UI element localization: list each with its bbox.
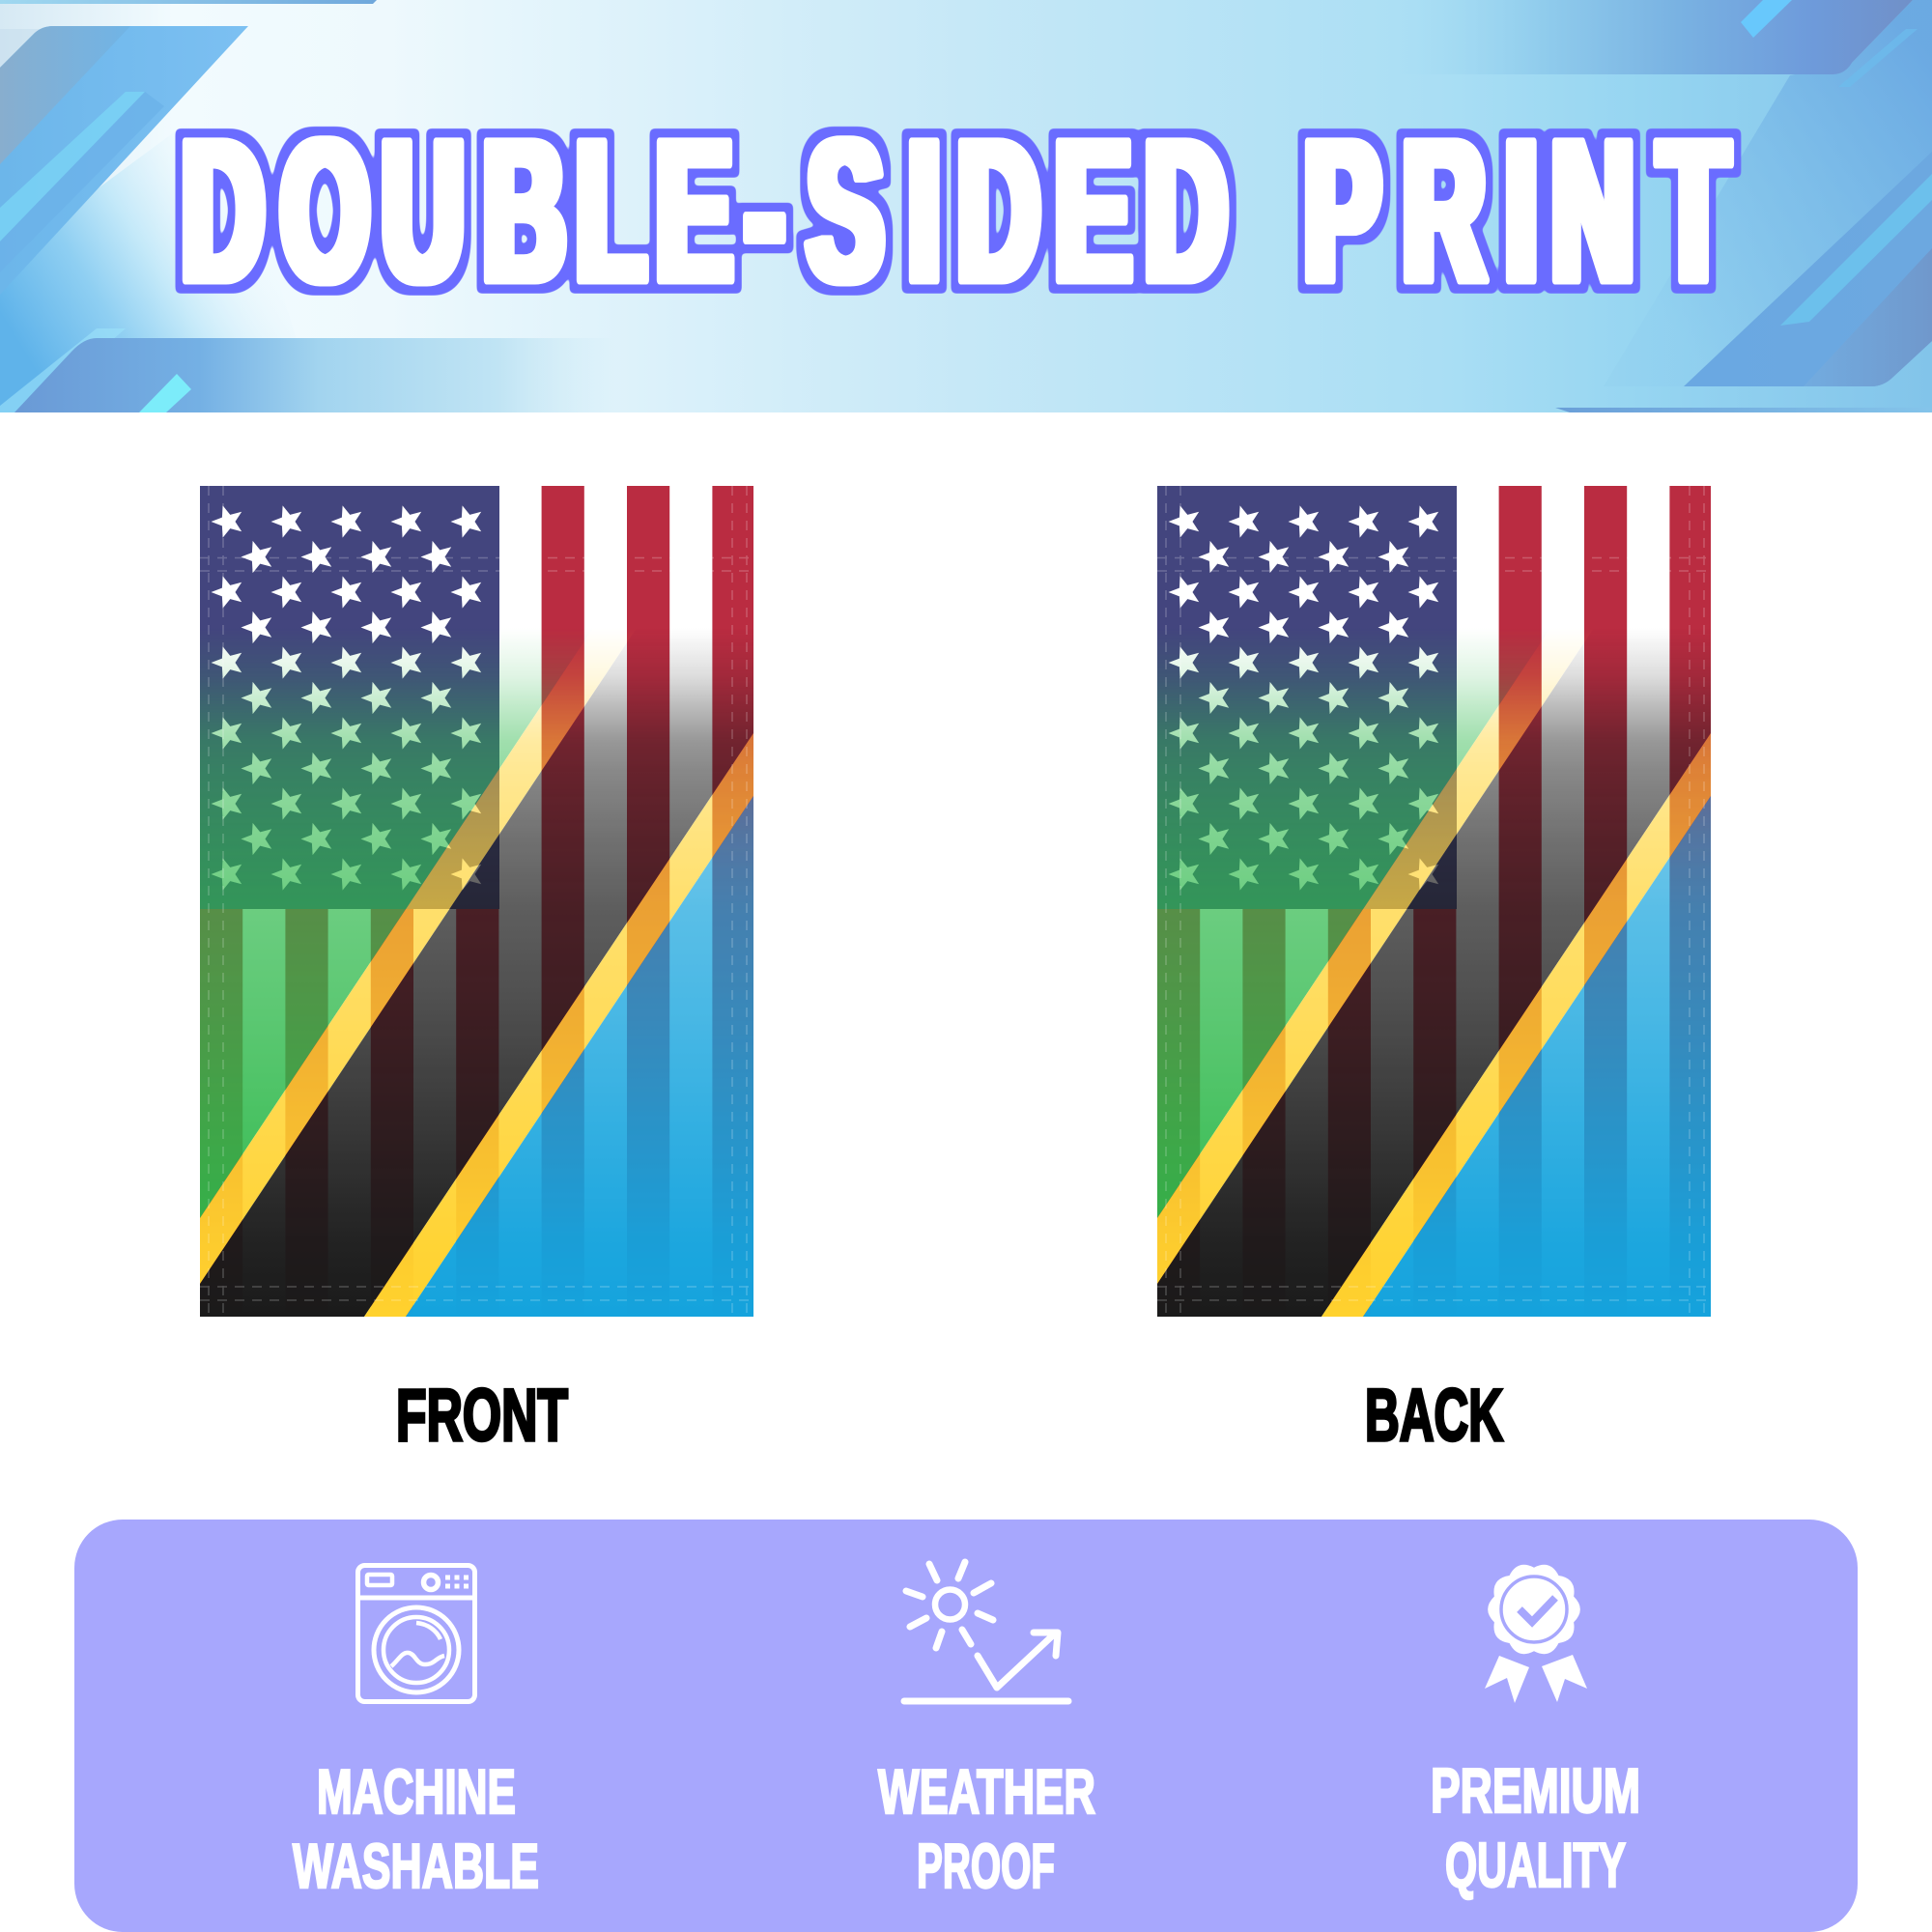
flag: front	[200, 486, 755, 1317]
label: machine washable	[293, 1756, 539, 1901]
icon: sun and weather check	[904, 1562, 1068, 1701]
label: premium quality	[1431, 1755, 1640, 1900]
panel: features	[74, 1520, 1858, 1932]
label: weather proof	[878, 1756, 1095, 1901]
header banner	[0, 0, 1932, 412]
label: premium quality: PREMIUM	[1431, 1755, 1640, 1826]
icon: quality ribbon badge	[1485, 1565, 1587, 1703]
label: weather proof: WEATHER	[878, 1756, 1095, 1827]
label: premium quality: QUALITY	[1445, 1830, 1626, 1900]
flag: back	[1157, 486, 1713, 1317]
label: back: BACK	[1365, 1375, 1503, 1457]
label: weather proof: PROOF	[917, 1831, 1055, 1901]
label: machine washable: WASHABLE	[293, 1831, 539, 1901]
title: DOUBLE-SIDED PRINT	[182, 98, 1728, 323]
icon: washing machine	[357, 1565, 475, 1702]
label: front: FRONT	[396, 1375, 568, 1457]
label: machine washable: MACHINE	[317, 1756, 516, 1827]
